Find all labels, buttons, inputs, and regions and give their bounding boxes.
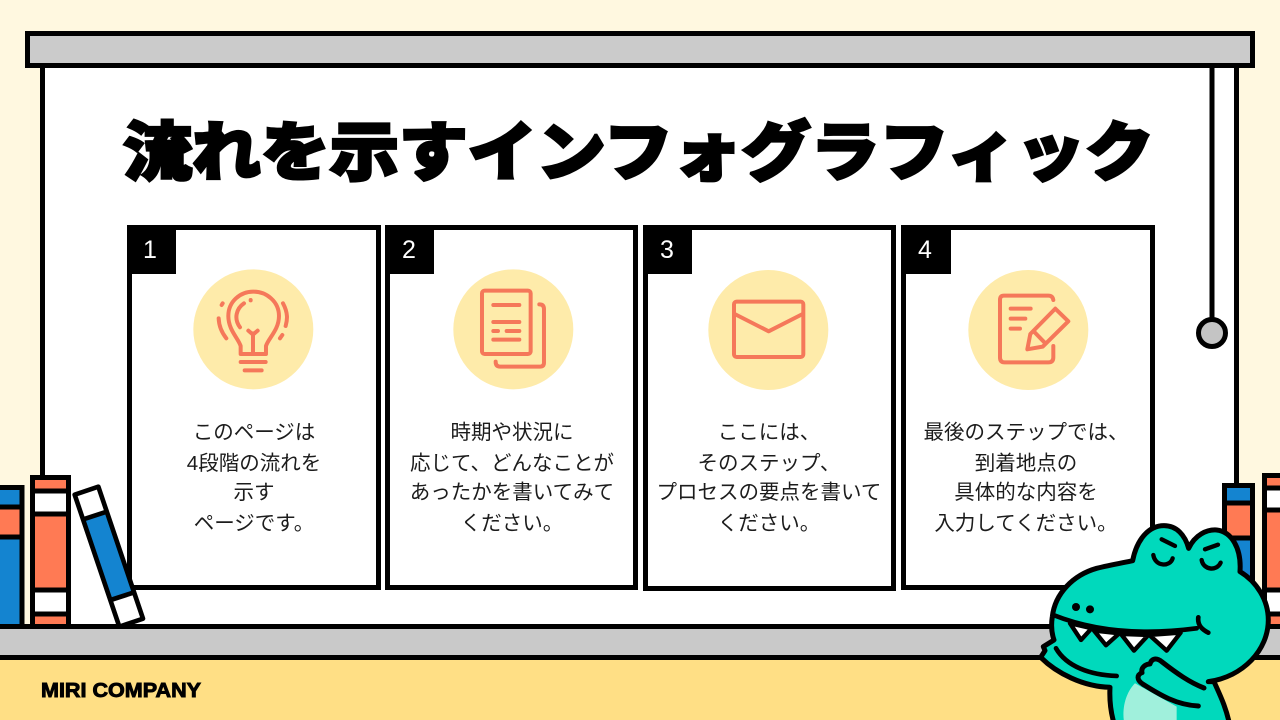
croc eyes and brows: [1153, 539, 1221, 569]
step number 1: [127, 225, 176, 274]
step 3 text: そのステップ、: [698, 452, 840, 475]
icon: envelope: [708, 270, 828, 390]
panel: step 3: [643, 225, 894, 588]
croc nostrils: [1072, 603, 1094, 613]
step number 4: [901, 225, 951, 274]
step 2 text: 時期や状況に: [450, 421, 574, 444]
company name: MIRI COMPANY: [41, 680, 202, 702]
croc belly: [1123, 683, 1177, 720]
step number 2: [385, 225, 434, 274]
step 4 text: [924, 421, 1128, 535]
book: orange and white: [32, 478, 68, 626]
book: leaning blue: [75, 487, 143, 627]
step 4 text: 最後のステップでは、: [924, 421, 1128, 444]
panel: step 4: [901, 225, 1152, 588]
book: orange and white right: [1264, 476, 1280, 626]
croc silhouette: [1041, 526, 1268, 720]
icon: light bulb: [193, 269, 313, 389]
book: blue and orange right: [1224, 486, 1252, 626]
step 4 text: 具体的な内容を: [954, 481, 1098, 504]
step 1 text: 4段階の流れを: [187, 452, 321, 475]
croc teeth: [1070, 623, 1181, 651]
icon: note and pencil: [968, 270, 1088, 390]
step 4 text: 入力してください。: [934, 512, 1118, 535]
step 1 text: [187, 421, 321, 535]
books right: [1224, 476, 1280, 626]
books left: [0, 478, 143, 627]
step 2 text: 応じて、どんなことが: [410, 452, 614, 475]
step 1 text: このページは: [193, 421, 315, 444]
croc left arm crease: [1056, 648, 1117, 676]
step number 2: 2: [402, 236, 416, 264]
croc mouth: [1053, 615, 1208, 633]
croc right arm: [1138, 659, 1204, 706]
panel: step 1: [127, 225, 378, 588]
step 3 text: プロセスの要点を書いて: [657, 481, 881, 504]
step 2 text: [410, 421, 614, 535]
crocodile mascot: [1041, 526, 1268, 720]
step 3 text: ください。: [718, 512, 820, 535]
pull cord: [1198, 66, 1226, 346]
title: 流れを示すインフォグラフィック: [123, 117, 1154, 189]
step number 3: [643, 225, 692, 274]
step 2 text: あったかを書いてみて: [410, 481, 614, 504]
icon: documents: [453, 269, 573, 389]
panel: step 2: [385, 225, 636, 588]
projector screen: [28, 34, 1252, 630]
step 1 text: ページです。: [194, 512, 314, 535]
screen roller bar: [28, 34, 1252, 66]
step 1 text: 示す: [234, 481, 274, 504]
step 4 text: 到着地点の: [975, 452, 1077, 475]
book: blue and orange: [0, 488, 22, 626]
step number 1: 1: [143, 236, 157, 264]
step number 4: 4: [918, 236, 932, 264]
step 3 text: ここには、: [718, 421, 820, 444]
step 3 text: [657, 421, 881, 535]
step number 3: 3: [660, 236, 674, 264]
floor band: [0, 626, 1280, 720]
step 2 text: ください。: [461, 512, 563, 535]
